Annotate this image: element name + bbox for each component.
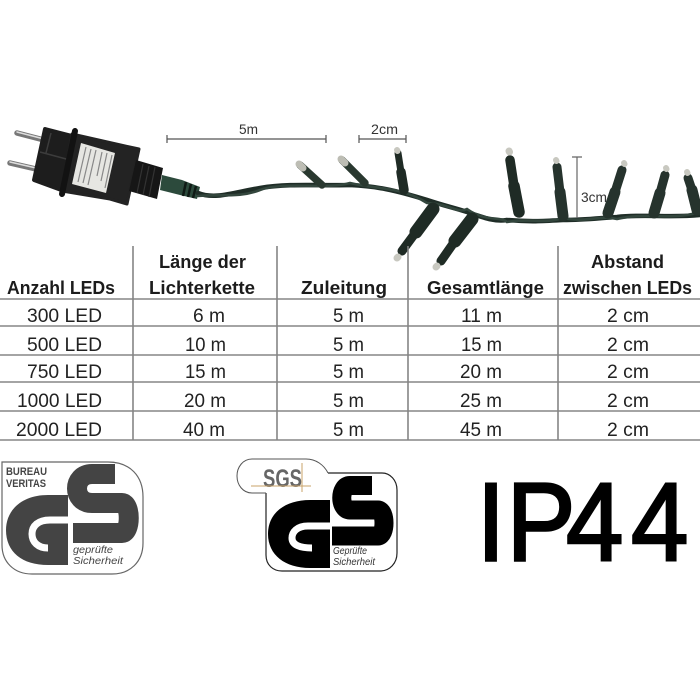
row: 1000 LED: 2 cm xyxy=(607,391,649,412)
header row: Anzahl LEDs xyxy=(7,278,115,298)
certifier name: VERITAS xyxy=(6,478,46,490)
row: 500 LED: 15 m xyxy=(461,335,502,356)
certifier name: BUREAU xyxy=(6,466,47,478)
logo frame xyxy=(2,462,143,574)
dimension: 2cm LED spacing: 2cm xyxy=(371,122,398,137)
row: 500 LED: 2 cm xyxy=(607,335,649,356)
icon: screw collar xyxy=(129,160,163,199)
SGS badge xyxy=(237,459,328,493)
row: 1000 LED xyxy=(17,391,649,412)
header row: Gesamtlänge xyxy=(427,278,544,298)
row: 750 LED: 5 m xyxy=(333,362,364,383)
caption: geprüfte xyxy=(73,544,113,556)
row: 500 LED xyxy=(27,335,649,356)
dimension: 5m lead length: 5m xyxy=(239,122,258,137)
rating: IP44: IP44 xyxy=(477,460,688,584)
photo: power plug adapter xyxy=(10,129,200,204)
caption xyxy=(73,544,124,567)
caption: Sicherheit xyxy=(333,557,376,568)
table: LED chain specifications xyxy=(0,246,700,441)
SGS badge: SGS xyxy=(263,465,302,493)
LED 1 xyxy=(299,164,322,185)
logo: SGS GS mark xyxy=(237,459,397,571)
LED 6 xyxy=(608,163,624,213)
row: 500 LED: 10 m xyxy=(185,335,226,356)
dimension: 2cm LED spacing xyxy=(359,122,406,143)
dimension: 3cm LED height: 3cm xyxy=(581,190,607,205)
icon: product label xyxy=(72,143,115,193)
row: 500 LED: 5 m xyxy=(333,335,364,356)
table grid xyxy=(0,246,700,440)
icon: plug head xyxy=(34,129,76,191)
row: 300 LED: 6 m xyxy=(193,306,225,327)
row: 750 LED xyxy=(27,362,649,383)
dimension: 3cm LED height xyxy=(572,157,607,218)
header row: Zuleitung xyxy=(301,278,387,298)
LED 2 xyxy=(341,159,365,183)
LED 4 xyxy=(509,151,519,212)
icon: plug pins xyxy=(10,132,44,169)
row: 300 LED: 5 m xyxy=(333,306,364,327)
row: 750 LED: 15 m xyxy=(185,362,226,383)
row: 300 LED: 2 cm xyxy=(607,306,649,327)
header row xyxy=(7,252,692,298)
caption xyxy=(333,546,376,568)
row: 2000 LED: 40 m xyxy=(183,420,225,441)
row: 300 LED: 300 LED xyxy=(27,306,102,327)
row: 750 LED: 750 LED xyxy=(27,362,102,383)
LED 7 xyxy=(654,168,666,213)
row: 500 LED: 500 LED xyxy=(27,335,102,356)
letter S xyxy=(332,486,384,536)
row: 1000 LED: 25 m xyxy=(460,391,502,412)
row: 300 LED: 11 m xyxy=(461,306,502,327)
row: 1000 LED: 5 m xyxy=(333,391,364,412)
icon: adapter body xyxy=(62,131,139,204)
header row: zwischen LEDs xyxy=(563,278,692,298)
row: 300 LED xyxy=(27,306,649,327)
row: 2000 LED: 2 cm xyxy=(607,420,649,441)
LED 8 xyxy=(687,172,697,210)
letter S xyxy=(73,474,129,533)
row: 1000 LED: 1000 LED xyxy=(17,391,102,412)
caption: Sicherheit xyxy=(73,555,124,567)
row: 750 LED: 20 m xyxy=(460,362,502,383)
caption: Geprüfte xyxy=(333,546,367,557)
LED 10 xyxy=(436,219,472,267)
dimension: 5m lead length xyxy=(167,122,326,143)
row: 2000 LED: 5 m xyxy=(333,420,364,441)
row: 2000 LED xyxy=(16,420,649,441)
letter G xyxy=(268,500,332,568)
logo frame xyxy=(266,473,397,571)
letter G xyxy=(6,495,70,565)
header row: Länge der xyxy=(159,252,246,272)
row: 2000 LED: 45 m xyxy=(460,420,502,441)
row: 750 LED: 2 cm xyxy=(607,362,649,383)
header row: Lichterkette xyxy=(149,278,255,298)
LED 3 xyxy=(397,150,404,190)
logo: Bureau Veritas GS mark xyxy=(2,462,143,574)
row: 2000 LED: 2000 LED xyxy=(16,420,102,441)
LED 5 xyxy=(556,160,563,216)
cable strands xyxy=(198,183,700,222)
row: 1000 LED: 20 m xyxy=(184,391,226,412)
icon: green cable connector xyxy=(160,175,200,199)
header row: Abstand xyxy=(591,252,664,272)
photo: twisted LED cable xyxy=(198,150,700,267)
LED 9 xyxy=(397,209,433,258)
certifier name xyxy=(6,466,47,490)
